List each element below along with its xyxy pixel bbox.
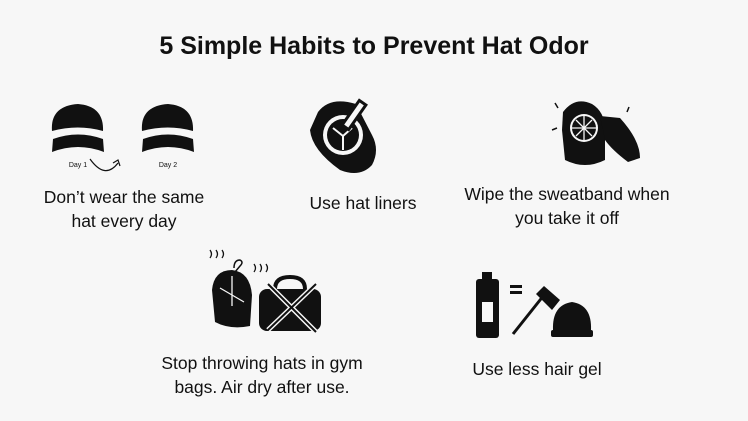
icon: hanging cap and crossed bag [210, 250, 321, 332]
item: gym bags: bags. Air dry after use. [174, 377, 350, 397]
item: hair gel [472, 272, 602, 379]
icon: cap with liner [310, 100, 376, 173]
item: gym bags [161, 250, 363, 397]
icon: cap wiped by hand [552, 101, 640, 165]
icon: cap day 2 [142, 104, 194, 152]
item: same hat every day: Day 2 [159, 162, 177, 169]
item: hat liners [310, 100, 417, 213]
item: same hat every day: Day 1 [69, 162, 87, 169]
item: same hat every day [44, 104, 204, 231]
item: wipe sweatband [464, 101, 670, 228]
text: Stop throwing hats in gym [161, 353, 363, 373]
item: wipe sweatband: you take it off [515, 208, 619, 228]
text: Use less hair gel [472, 359, 602, 379]
icon: gel bottle = comb + cap [476, 272, 593, 338]
arrow [90, 159, 120, 171]
item: same hat every day: hat every day [71, 211, 177, 231]
icon: cap day 1 [52, 104, 104, 152]
text: Wipe the sweatband when [464, 184, 670, 204]
text: Don’t wear the same [44, 187, 204, 207]
text: Use hat liners [310, 193, 417, 213]
title: 5 Simple Habits to Prevent Hat Odor [159, 32, 589, 60]
